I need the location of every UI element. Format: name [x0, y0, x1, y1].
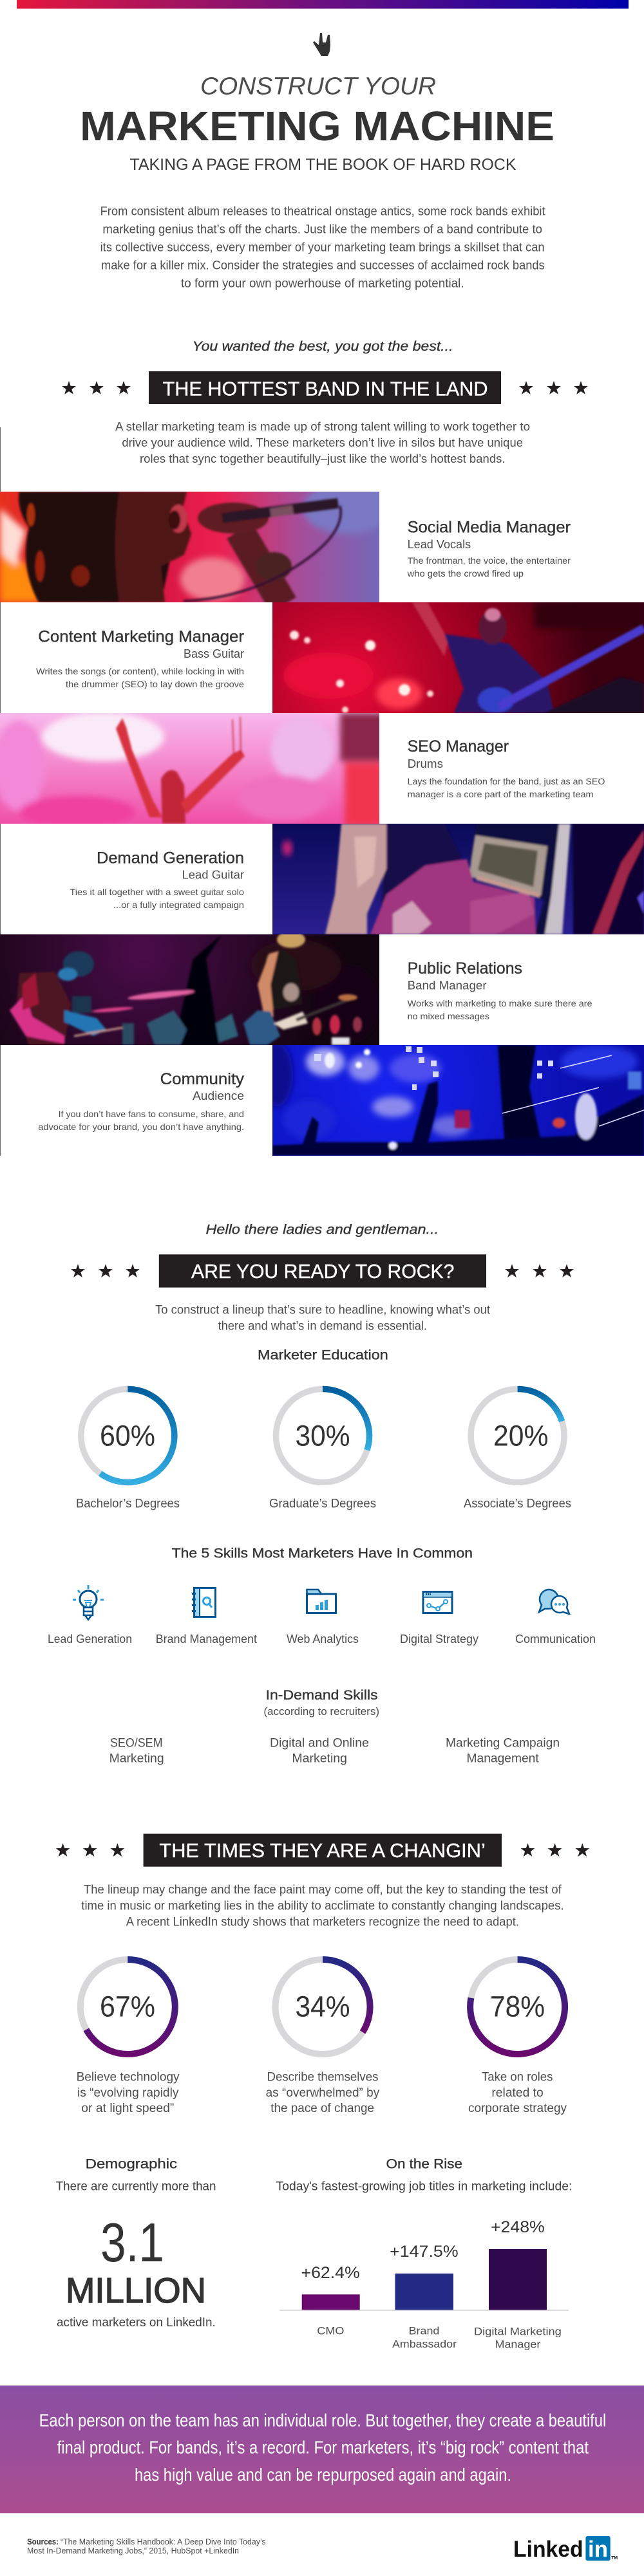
- icon: chat bubbles: [539, 1589, 569, 1614]
- panel: on the rise: On the Rise: [386, 2157, 462, 2172]
- role: social media manager: The frontman, the voice, the entertainer: [408, 555, 571, 566]
- sources: Most In-Demand Marketing Jobs,” 2015, HubSpot +LinkedIn: [27, 2546, 239, 2555]
- section banner: times they are a changin: [56, 1834, 589, 1867]
- donut chart: 67 percent: Believe technology: [77, 2071, 180, 2084]
- donut chart: 67 percent: is “evolving rapidly: [77, 2086, 179, 2100]
- in-demand skills list: [109, 1736, 560, 1766]
- section intro paragraph: The lineup may change and the face paint may come off, but the key to standing the test of: [84, 1883, 562, 1897]
- donut chart: 60 percent: 60%: [100, 1420, 155, 1452]
- section intro paragraph: there and what’s in demand is essential.: [218, 1320, 427, 1333]
- sources: Sources:: [27, 2537, 59, 2546]
- intro paragraph: make for a killer mix. Consider the strategies and successes of acclaimed rock bands: [101, 259, 545, 272]
- section intro paragraph: A recent LinkedIn study shows that marketers recognize the need to adapt.: [126, 1915, 519, 1929]
- role: demand generation: Lead Guitar: [182, 868, 244, 882]
- role: content marketing manager: the drummer (SEO) to lay down the groove: [66, 679, 244, 689]
- skill labels: Web Analytics: [287, 1632, 359, 1645]
- bar chart: Ambassador: [392, 2338, 457, 2350]
- in-demand skills list: Marketing Campaign: [446, 1736, 560, 1750]
- stars left: [56, 1843, 124, 1857]
- stars right: [521, 1843, 589, 1857]
- donut chart: 67 percent: [77, 1960, 180, 2115]
- role: seo manager: Lays the foundation for the band, just as an SEO: [408, 776, 605, 786]
- section kicker: you wanted the best: You wanted the best, you got the best...: [192, 339, 453, 354]
- section kicker: hello there: Hello there ladies and gentleman...: [206, 1223, 439, 1237]
- role: public relations: Band Manager: [408, 979, 487, 992]
- title line: construct your: CONSTRUCT YOUR: [200, 73, 436, 100]
- bar chart: +62.4%: [301, 2264, 360, 2282]
- bar chart: CMO: [317, 2324, 344, 2337]
- role: public relations: no mixed messages: [408, 1011, 489, 1021]
- title line: marketing machine: MARKETING MACHINE: [80, 103, 554, 149]
- subtitle: TAKING A PAGE FROM THE BOOK OF HARD ROCK: [130, 156, 516, 174]
- role: public relations: Works with marketing to make sure there are: [408, 998, 592, 1008]
- icon: notebook search: [192, 1588, 215, 1617]
- heading: in-demand skills: [263, 1688, 379, 1718]
- section intro paragraph: time in music or marketing lies in the ability to acclimate to constantly changing landscapes.: [81, 1900, 564, 1913]
- donut chart: 78 percent: [468, 1960, 567, 2115]
- sources: “The Marketing Skills Handbook: A Deep Dive Into Today’s: [61, 2537, 266, 2546]
- icon: light bulb: [73, 1585, 104, 1620]
- skill labels: Digital Strategy: [400, 1632, 479, 1645]
- panel: closing statement: has high value and can be repurposed again and again.: [135, 2465, 511, 2485]
- skill labels: Lead Generation: [48, 1632, 132, 1645]
- logo: linkedin: [513, 2536, 618, 2562]
- section intro paragraph: roles that sync together beautifully–just like the world’s hottest bands.: [140, 452, 505, 465]
- role: content marketing manager: Content Marketing Manager: [38, 627, 244, 645]
- photo: concert audience: [261, 1042, 644, 1156]
- stars left: [62, 381, 131, 394]
- role: content marketing manager: Writes the songs (or content), while locking in with: [36, 666, 244, 676]
- photo: band on stage: [0, 931, 380, 1045]
- panel: demographic: There are currently more than: [56, 2180, 216, 2193]
- skill labels: Brand Management: [156, 1632, 257, 1645]
- bar chart: Digital Marketing: [474, 2325, 562, 2337]
- donut chart: 20 percent: 20%: [493, 1420, 548, 1452]
- intro paragraph: From consistent album releases to theatrical onstage antics, some rock bands exhibit: [100, 205, 545, 219]
- photo: lead guitar closeup: [272, 824, 644, 934]
- intro paragraph: to form your own powerhouse of marketing potential.: [181, 277, 464, 290]
- bar chart: Brand: [409, 2324, 439, 2337]
- banner text: THE TIMES THEY ARE A CHANGIN’: [159, 1839, 486, 1862]
- panel: on the rise: Today's fastest-growing job titles in marketing include:: [276, 2180, 572, 2193]
- panel: closing statement: [0, 2386, 644, 2513]
- donut chart: 60 percent: Bachelor’s Degrees: [76, 1497, 180, 1511]
- role: public relations: Public Relations: [408, 959, 522, 978]
- role: social media manager: Social Media Manager: [408, 519, 571, 537]
- panel: demographic: [56, 2157, 216, 2330]
- intro paragraph: marketing genius that’s off the charts. Just like the members of a band contribute to: [102, 223, 542, 237]
- donut chart: 34 percent: as “overwhelmed” by: [266, 2086, 380, 2100]
- role: content marketing manager: Bass Guitar: [184, 647, 244, 660]
- role: social media manager: Lead Vocals: [408, 537, 471, 551]
- section banner: hottest band: [62, 371, 588, 404]
- donut chart: 20 percent: [464, 1389, 571, 1511]
- donut chart: 34 percent: the pace of change: [270, 2102, 374, 2115]
- donut chart: 34 percent: 34%: [295, 1990, 350, 2023]
- role: seo manager: SEO Manager: [408, 737, 509, 755]
- big number: 3.1: [100, 2212, 164, 2274]
- icon: browser chart: [423, 1592, 452, 1613]
- skill labels: [48, 1632, 596, 1645]
- donut chart: 67 percent: 67%: [100, 1990, 155, 2023]
- heading: five skills: The 5 Skills Most Marketers Have In Common: [172, 1546, 473, 1561]
- logo: linkedin: Linked: [513, 2537, 583, 2562]
- bar chart: +248%: [491, 2218, 545, 2236]
- donut chart: 78 percent: related to: [491, 2086, 544, 2100]
- role: community: If you don’t have fans to consume, share, and: [59, 1109, 244, 1119]
- logo: linkedin: in: [588, 2537, 608, 2562]
- icon: rock hand: [313, 33, 330, 56]
- stars left: [71, 1264, 140, 1277]
- section intro paragraph: [81, 1883, 564, 1929]
- donut chart: 78 percent: corporate strategy: [468, 2102, 567, 2115]
- heading: in-demand skills: In-Demand Skills: [266, 1688, 378, 1703]
- donut chart: 78 percent: 78%: [490, 1990, 545, 2023]
- in-demand skills list: Management: [466, 1752, 539, 1766]
- in-demand skills list: Marketing: [109, 1752, 164, 1766]
- role: public relations: [408, 959, 592, 1021]
- role: community: [38, 1070, 245, 1132]
- role: content marketing manager: [36, 627, 244, 689]
- role: demand generation: ...or a fully integrated campaign: [113, 900, 244, 910]
- donut chart: 34 percent: [266, 1960, 380, 2115]
- photo: bass guitarist: [272, 602, 644, 713]
- photo: lead singer: [0, 492, 379, 602]
- section intro paragraph: To construct a lineup that’s sure to headline, knowing what’s out: [155, 1304, 491, 1317]
- panel: on the rise: [276, 2157, 572, 2351]
- in-demand skills list: Marketing: [292, 1752, 347, 1766]
- top gradient bar: [17, 0, 629, 9]
- stars right: [505, 1264, 574, 1277]
- section banner: ready to rock: [71, 1254, 574, 1288]
- intro paragraph: its collective success, every member of your marketing team brings a skillset that can: [100, 241, 545, 255]
- panel: demographic: Demographic: [86, 2157, 177, 2172]
- in-demand skills list: SEO/SEM: [110, 1736, 162, 1750]
- donut chart: 78 percent: Take on roles: [482, 2071, 553, 2084]
- banner text: THE HOTTEST BAND IN THE LAND: [162, 378, 488, 400]
- role: seo manager: manager is a core part of the marketing team: [408, 789, 594, 799]
- role: seo manager: Drums: [408, 757, 443, 770]
- title block: [80, 73, 554, 174]
- bar chart: +147.5%: [390, 2243, 459, 2261]
- role: demand generation: [70, 849, 244, 910]
- donut chart: 60 percent: [76, 1389, 180, 1511]
- role: community: advocate for your brand, you don’t have anything.: [38, 1122, 244, 1132]
- role: social media manager: [407, 519, 571, 579]
- banner text: ARE YOU READY TO ROCK?: [191, 1260, 454, 1283]
- role: community: Community: [160, 1070, 245, 1088]
- section intro paragraph: drive your audience wild. These marketers don’t live in silos but have unique: [122, 436, 523, 449]
- role: seo manager: [408, 737, 605, 799]
- donut chart: 30 percent: [269, 1389, 376, 1511]
- bar chart: [279, 2218, 569, 2351]
- intro paragraph: [100, 205, 545, 290]
- donut chart: 30 percent: 30%: [295, 1420, 350, 1452]
- donut chart: 30 percent: Graduate’s Degrees: [269, 1497, 376, 1511]
- heading: in-demand skills: (according to recruiters): [263, 1706, 379, 1718]
- skill labels: Communication: [515, 1632, 596, 1645]
- section intro paragraph: [115, 420, 530, 465]
- donut chart: 67 percent: or at light speed”: [81, 2102, 174, 2115]
- panel: demographic: MILLION: [66, 2270, 206, 2310]
- section intro paragraph: A stellar marketing team is made up of strong talent willing to work together to: [115, 420, 530, 433]
- sources: [27, 2537, 266, 2555]
- stars right: [519, 381, 588, 394]
- donut chart: 34 percent: Describe themselves: [267, 2071, 378, 2084]
- heading: marketer education: Marketer Education: [258, 1348, 388, 1363]
- role: demand generation: Ties it all together with a sweet guitar solo: [70, 887, 244, 897]
- panel: demographic: active marketers on LinkedIn.: [57, 2316, 216, 2330]
- icon: analytics folder: [307, 1589, 336, 1613]
- logo: linkedin: TM: [611, 2556, 618, 2561]
- section intro paragraph: [155, 1304, 491, 1333]
- in-demand skills list: Digital and Online: [270, 1736, 369, 1750]
- role: community: Audience: [193, 1089, 244, 1102]
- bar chart: Manager: [495, 2339, 541, 2351]
- role: demand generation: Demand Generation: [97, 849, 244, 867]
- photo: drummer silhouette crowd: [0, 712, 385, 828]
- donut chart: 20 percent: Associate’s Degrees: [464, 1497, 571, 1511]
- role: social media manager: who gets the crowd fired up: [407, 568, 524, 579]
